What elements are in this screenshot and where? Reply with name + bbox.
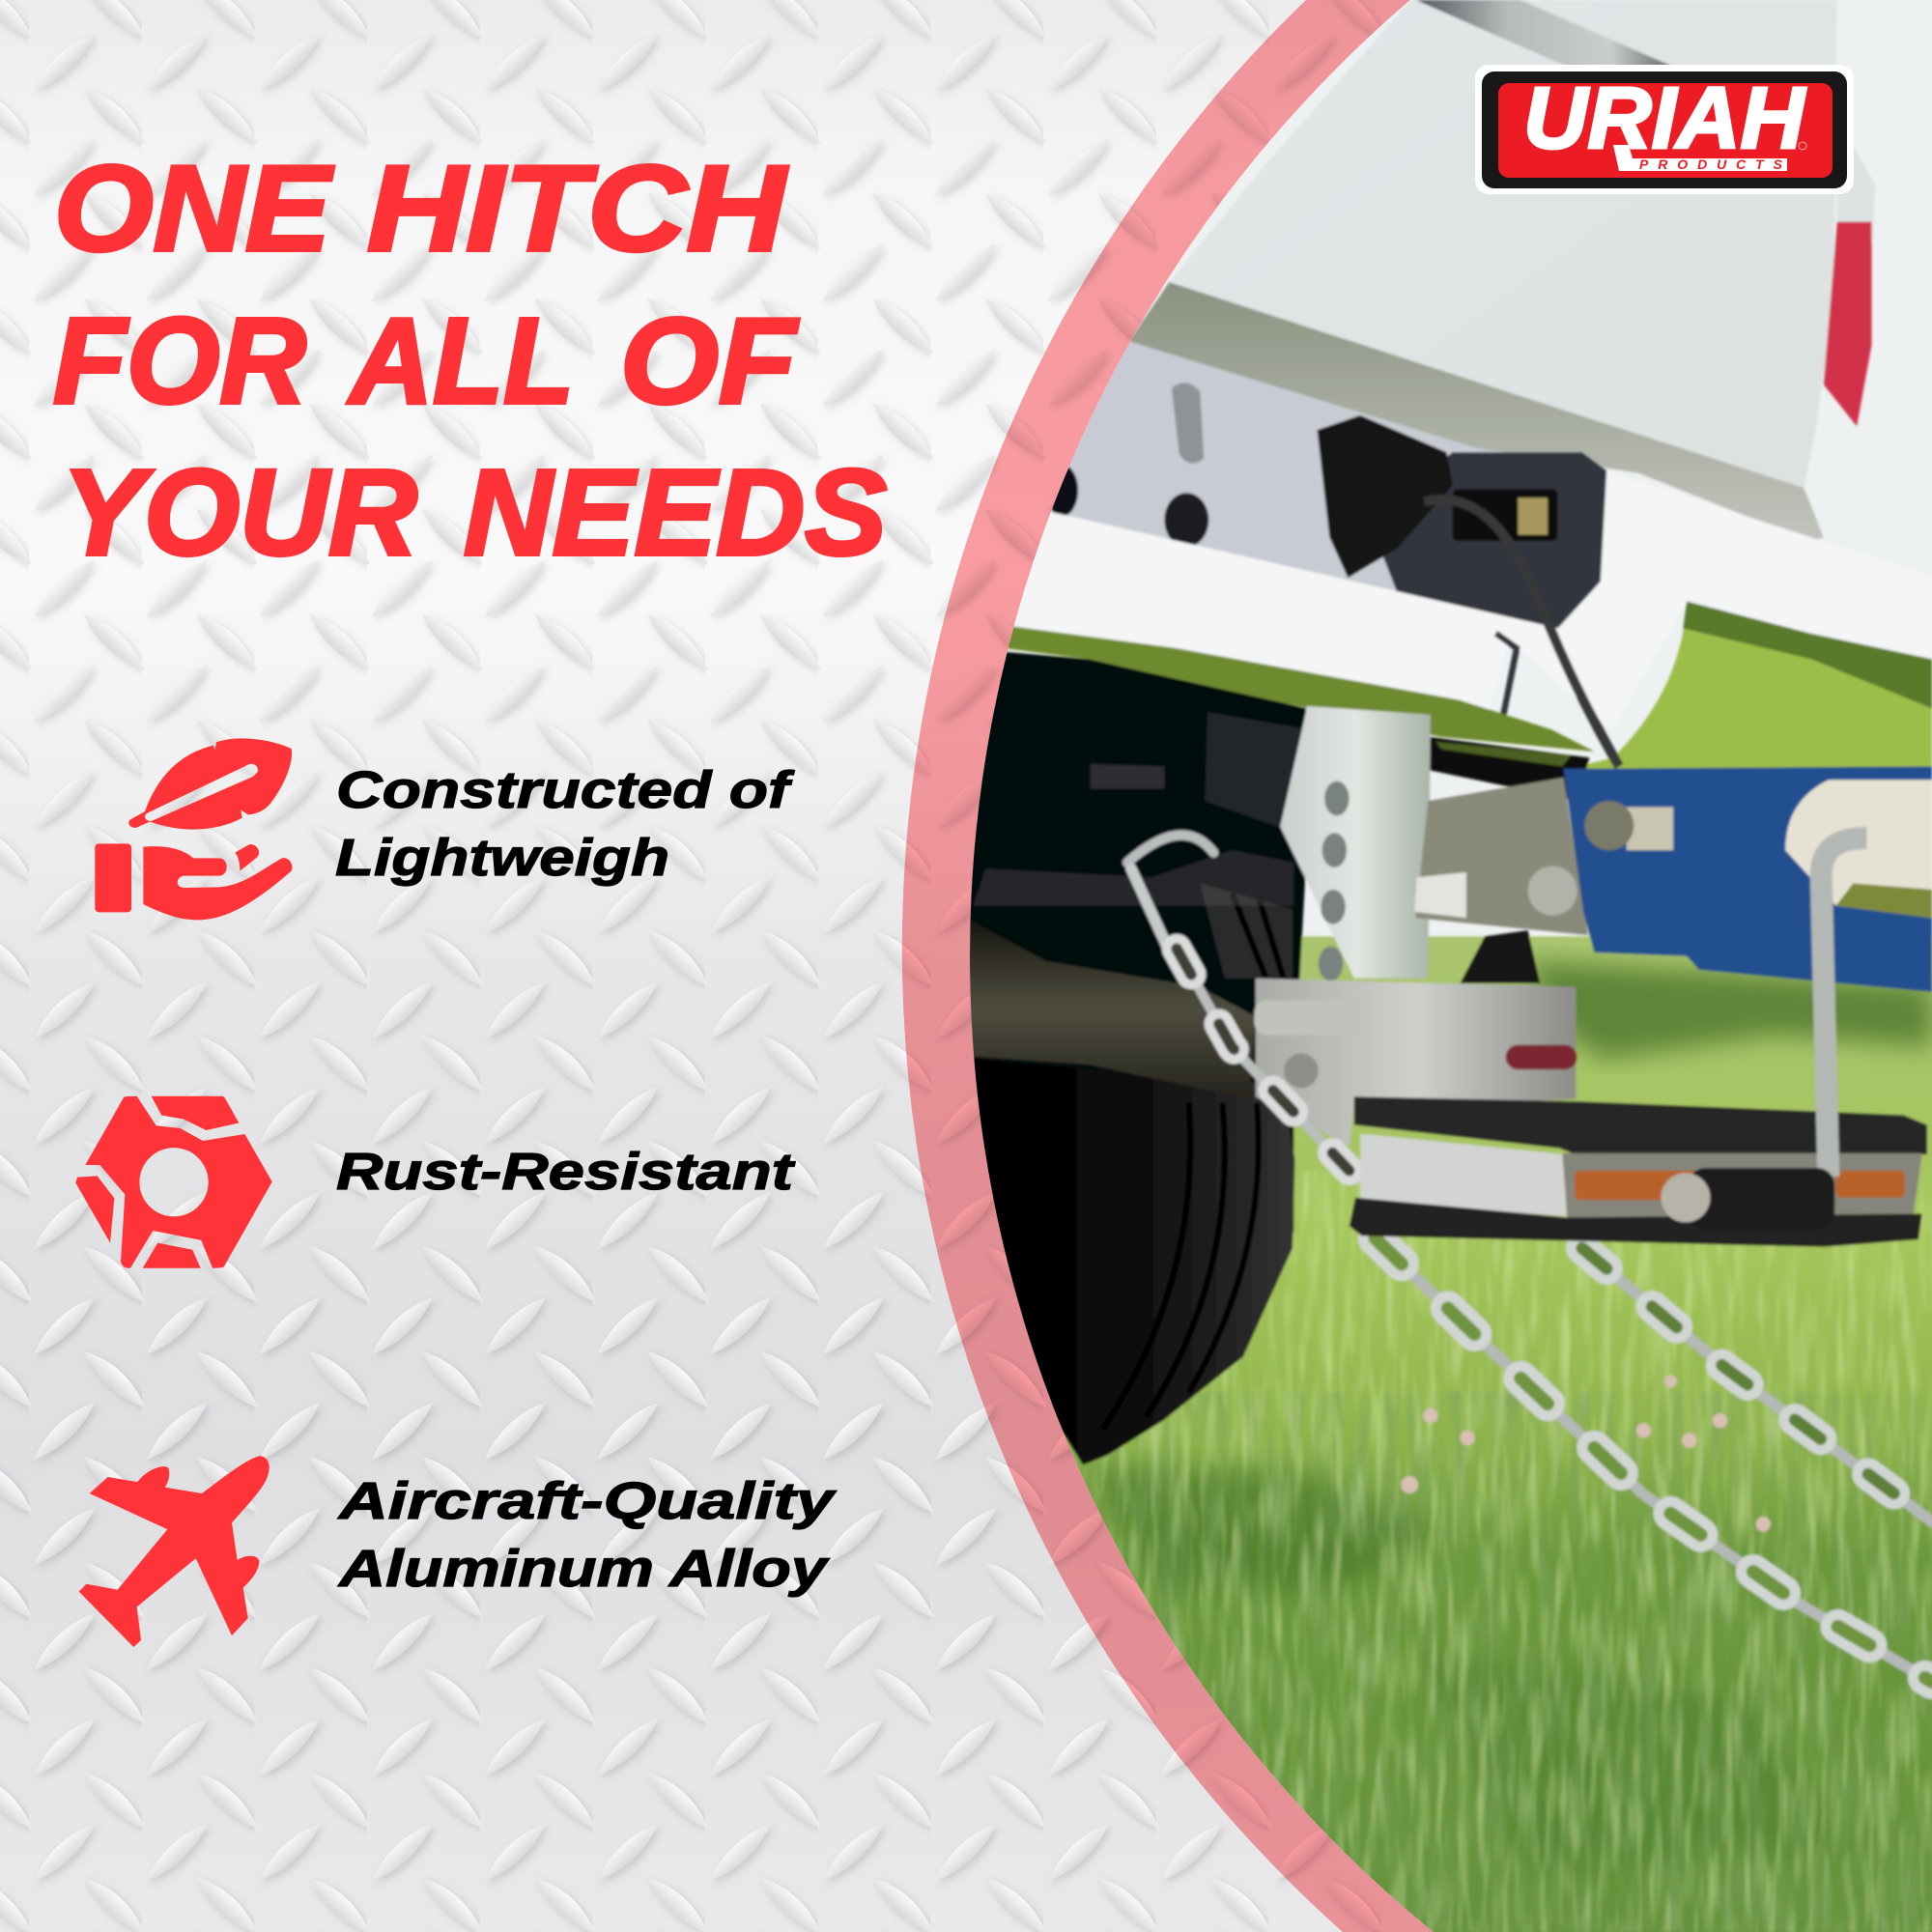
title: ONE xyxy=(54,140,334,276)
logo: Uriah Products: URIAH xyxy=(1523,71,1806,167)
crank knob xyxy=(1661,1168,1834,1230)
title: FOR xyxy=(53,293,306,429)
label: aircraft-quality aluminum alloy: Aircraft-Quality xyxy=(336,1472,838,1530)
tailgate lip xyxy=(1128,282,1824,542)
drop hitch shank xyxy=(1280,706,1431,980)
ball mount box xyxy=(1254,979,1577,1146)
step bottom bar xyxy=(1350,1198,1922,1247)
panel holes xyxy=(1046,383,1208,547)
label: aircraft-quality aluminum alloy xyxy=(336,1472,838,1598)
photo: truck, hitch and grass xyxy=(869,0,1932,1932)
bumper steel panel xyxy=(1048,341,1608,629)
warning tag and ball xyxy=(1414,867,1577,983)
title xyxy=(53,140,887,581)
bed rail xyxy=(1416,0,1676,68)
title: YOUR xyxy=(62,444,417,581)
grass field xyxy=(1061,933,1932,1932)
frame bolt xyxy=(1584,801,1673,850)
icon: airplane xyxy=(79,1456,270,1647)
step top pad xyxy=(1354,1096,1927,1154)
lens window xyxy=(1453,489,1557,541)
feature: rust-resistant xyxy=(75,1096,795,1268)
logo: Uriah Products xyxy=(1475,65,1854,194)
jack crank handle xyxy=(1821,838,1866,1177)
clover flowers xyxy=(1401,1375,1771,1531)
trailer plug socket xyxy=(1318,415,1453,578)
taillight xyxy=(1824,148,1875,426)
undercarriage xyxy=(961,648,1306,1233)
coupler xyxy=(1416,778,1588,935)
step housing xyxy=(1360,1133,1922,1217)
label: constructed of lightweigh: Constructed of xyxy=(336,761,795,819)
label: constructed of lightweigh: Lightweigh xyxy=(335,829,669,887)
title: HITCH xyxy=(367,140,788,276)
jack tube xyxy=(1785,780,1932,918)
icon: cracked hex nut xyxy=(75,1096,272,1268)
title: OF xyxy=(620,293,799,429)
pink arc band xyxy=(902,0,1932,1932)
feature: lightweight xyxy=(95,738,795,920)
title: ALL xyxy=(347,293,574,429)
truck tailgate xyxy=(1169,0,1837,488)
blue trailer frame xyxy=(1564,766,1932,992)
chrome bumper xyxy=(1003,470,1932,770)
feature: aluminum alloy xyxy=(79,1456,838,1647)
bumper dark box xyxy=(1368,452,1606,629)
title: NEEDS xyxy=(464,444,887,581)
safety chains xyxy=(1127,836,1932,1682)
power cable xyxy=(1424,499,1619,766)
exhaust pipe xyxy=(966,918,1256,1099)
frame rail xyxy=(974,850,1293,905)
label: aircraft-quality aluminum alloy: Aluminum Alloy xyxy=(337,1540,831,1598)
icon: hand holding feather xyxy=(95,738,292,920)
hitch pin xyxy=(1091,764,1164,788)
tire xyxy=(974,884,1295,1465)
logo: Uriah Products: PRODUCTS xyxy=(1639,156,1783,172)
receiver tube xyxy=(1205,712,1309,828)
label: constructed of lightweigh xyxy=(335,761,795,887)
label: rust-resistant: Rust-Resistant xyxy=(336,1143,795,1201)
